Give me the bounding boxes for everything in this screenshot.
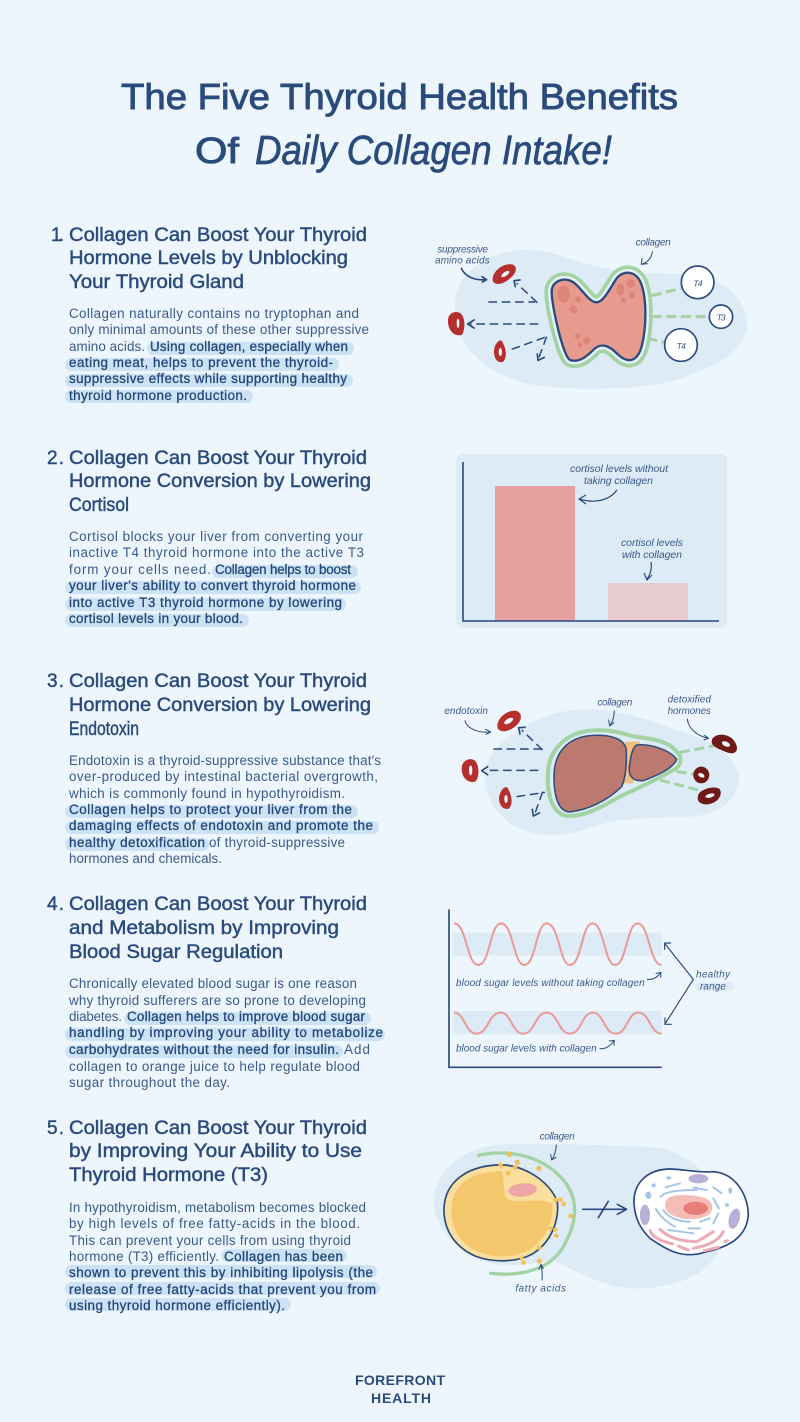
label: cortisol with collagen <box>621 537 684 580</box>
section 1 body: Using collagen, especially when <box>150 339 348 354</box>
label: with collagen: blood sugar levels with collagen <box>456 1043 597 1054</box>
section 1 body: Collagen naturally contains no tryptophan and <box>69 306 359 321</box>
fatty acid dots <box>498 1152 573 1265</box>
label: suppressive amino acids <box>435 244 490 282</box>
blocked arrow <box>583 1201 627 1218</box>
label: cortisol without collagen <box>570 463 669 504</box>
suppression arrows <box>468 280 547 360</box>
fat cell <box>444 1165 558 1261</box>
bar: with collagen <box>608 583 688 621</box>
label: collagen: collagen <box>597 697 633 708</box>
section 4 body: why thyroid sufferers are so prone to developing <box>68 993 366 1008</box>
healthy range bands <box>453 933 662 1034</box>
section 4 body: Chronically elevated blood sugar is one reason <box>69 976 357 991</box>
section 4 heading: 4. <box>47 894 64 915</box>
title: The Five Thyroid Health Benefits <box>121 76 678 117</box>
section 4 heading <box>47 894 367 963</box>
section 4 body: Add <box>344 1042 370 1057</box>
section 4 text <box>47 894 385 1090</box>
section 3 body: of thyroid-suppressive <box>209 835 345 850</box>
section 3 heading <box>47 671 371 740</box>
section 3 heading: Hormone Conversion by Lowering <box>69 695 371 716</box>
toxin arrows <box>482 727 545 816</box>
label: detoxified hormones <box>668 694 711 740</box>
section 1 body <box>65 306 369 403</box>
section 3 body: hormones and chemicals. <box>69 851 222 866</box>
label: detoxified hormones: detoxified <box>668 694 711 705</box>
section 5 heading: by Improving Your Ability to Use <box>69 1141 362 1162</box>
section 3 heading: Collagen Can Boost Your Thyroid <box>69 671 367 692</box>
section 3 body: over-produced by intestinal bacterial overgrowth, <box>69 769 378 784</box>
healthy cell <box>634 1169 748 1255</box>
illustration: liver <box>444 694 739 835</box>
section 2 heading: Hormone Conversion by Lowering <box>69 471 371 492</box>
bar: without collagen <box>495 486 575 621</box>
label: cortisol with collagen: with collagen <box>622 549 682 561</box>
section 1 heading: Your Thyroid Gland <box>69 272 244 293</box>
section 2 heading: Cortisol <box>69 495 129 516</box>
label: cortisol with collagen: cortisol levels <box>621 537 684 549</box>
section 5 body: by high levels of free fatty-acids in the blood. <box>69 1216 360 1231</box>
section 5 body: using thyroid hormone efficiently). <box>69 1298 285 1313</box>
section 2 body: your liver's ability to convert thyroid hormone <box>69 578 356 593</box>
logo: Forefront Health: HEALTH <box>371 1390 431 1406</box>
section 1 heading: Collagen Can Boost Your Thyroid <box>69 225 367 246</box>
detoxified hormone cells <box>693 735 737 804</box>
label: with collagen <box>456 1040 614 1054</box>
label: detoxified hormones: hormones <box>668 706 711 717</box>
label: healthy range: range <box>700 981 726 992</box>
title <box>121 76 678 173</box>
label: cortisol without collagen: taking collagen <box>584 475 653 487</box>
section 1 body: only minimal amounts of these other suppressive <box>69 322 369 337</box>
section 5 body <box>65 1200 380 1313</box>
label: collagen <box>597 697 633 726</box>
label: without collagen: blood sugar levels without taking collagen <box>456 978 645 989</box>
bar chart: cortisol levels <box>456 454 727 628</box>
section 5 heading <box>47 1118 367 1186</box>
section 4 heading: Blood Sugar Regulation <box>69 942 283 963</box>
section 3 heading: Endotoxin <box>69 719 139 740</box>
section 1 heading: Hormone Levels by Unblocking <box>69 248 348 269</box>
section 1 body: thyroid hormone production. <box>69 388 247 403</box>
label: endotoxin <box>444 706 491 734</box>
T3 circle <box>709 305 733 328</box>
section 2 heading: 2. <box>47 448 64 469</box>
section 2 heading: Collagen Can Boost Your Thyroid <box>69 448 367 469</box>
section 3 body: healthy detoxification <box>69 835 205 850</box>
section 5 heading: Thyroid Hormone (T3) <box>69 1165 268 1186</box>
section 3 body: Endotoxin is a thyroid-suppressive substance that's <box>69 753 381 768</box>
section 3 heading: 3. <box>47 671 64 692</box>
section 4 body: Collagen helps to improve blood sugar <box>127 1009 366 1024</box>
section 5 body: release of free fatty-acids that prevent you from <box>69 1282 376 1297</box>
section 2 body <box>65 529 364 627</box>
section 2 body: form your cells need. <box>69 562 211 577</box>
illustration: cell and fatty acids <box>434 1132 748 1295</box>
wave: with collagen <box>454 1013 662 1034</box>
label: without collagen <box>456 972 661 989</box>
label: endotoxin: endotoxin <box>444 706 488 717</box>
section 2 body: Cortisol blocks your liver from converting your <box>69 529 364 544</box>
section 4 heading: Collagen Can Boost Your Thyroid <box>69 894 367 915</box>
label: collagen <box>540 1132 575 1160</box>
collagen arc <box>478 1153 575 1274</box>
section 1 heading: 1. <box>51 225 64 246</box>
label: collagen: collagen <box>540 1132 575 1143</box>
liver lobes <box>554 735 677 812</box>
label: collagen: collagen <box>636 238 671 249</box>
endotoxin cells <box>462 711 521 809</box>
label: cortisol without collagen: cortisol levels without <box>570 463 669 475</box>
logo: Forefront Health <box>355 1372 445 1406</box>
label: healthy range <box>665 943 733 1024</box>
section 4 body: collagen to orange juice to help regulate blood <box>69 1059 360 1074</box>
title: Of <box>195 130 240 171</box>
section 4 body <box>65 976 385 1090</box>
T4 circle: T4 <box>693 278 703 288</box>
label: collagen <box>636 238 671 264</box>
section 1 text <box>51 225 369 403</box>
label: suppressive amino acids: suppressive <box>437 244 488 255</box>
amino acid cells <box>448 264 516 362</box>
illustration: thyroid gland <box>435 238 747 389</box>
section 5 body: Collagen has been <box>224 1249 343 1264</box>
T4 circle <box>681 266 714 299</box>
line chart: blood sugar levels <box>449 909 733 1067</box>
label: fatty acids <box>515 1264 566 1295</box>
section 1 heading <box>51 225 367 293</box>
label: suppressive amino acids: amino acids <box>435 256 490 267</box>
section 2 body: Collagen helps to boost <box>215 562 351 577</box>
section 4 body: carbohydrates without the need for insulin. <box>69 1042 339 1057</box>
title: Daily Collagen Intake! <box>255 127 612 173</box>
section 4 body: diabetes. <box>69 1009 122 1024</box>
section 3 text <box>47 671 381 866</box>
section 1 body: suppressive effects while supporting healthy <box>69 371 347 386</box>
section 5 body: shown to prevent this by inhibiting lipolysis (the <box>69 1265 373 1280</box>
logo: Forefront Health: FOREFRONT <box>355 1372 445 1388</box>
wave: without collagen <box>454 923 662 965</box>
section 4 body: sugar throughout the day. <box>69 1075 230 1090</box>
section 2 heading <box>47 448 371 516</box>
section 3 body: which is commonly found in hypothyroidism. <box>68 786 345 801</box>
T4 circle lower <box>665 329 697 361</box>
section 2 body: inactive T4 thyroid hormone into the active T3 <box>69 545 364 560</box>
section 3 body: Collagen helps to protect your liver from the <box>69 802 352 817</box>
section 4 body: handling by improving your ability to metabolize <box>69 1025 383 1040</box>
section 2 body: into active T3 thyroid hormone by lowering <box>69 595 342 610</box>
section 5 heading: 5. <box>47 1118 64 1139</box>
section 5 body: In hypothyroidism, metabolism becomes blocked <box>69 1200 366 1215</box>
section 3 body <box>65 753 381 866</box>
section 4 heading: and Metabolism by Improving <box>69 918 339 939</box>
section 3 body: damaging effects of endotoxin and promote the <box>69 818 373 833</box>
section 5 text <box>47 1118 380 1313</box>
label: healthy range: healthy <box>696 970 731 981</box>
T4 circle lower: T4 <box>677 341 686 351</box>
section 1 body: amino acids. <box>69 339 145 354</box>
section 5 body: hormone (T3) efficiently. <box>69 1249 219 1264</box>
label: fatty acids: fatty acids <box>515 1284 566 1295</box>
section 2 text <box>47 448 371 627</box>
section 2 body: cortisol levels in your blood. <box>69 611 243 626</box>
T3 circle: T3 <box>717 312 726 322</box>
section 5 heading: Collagen Can Boost Your Thyroid <box>69 1118 367 1139</box>
section 5 body: This can prevent your cells from using thyroid <box>69 1233 351 1248</box>
section 1 body: eating meat, helps to prevent the thyroid- <box>69 355 333 370</box>
